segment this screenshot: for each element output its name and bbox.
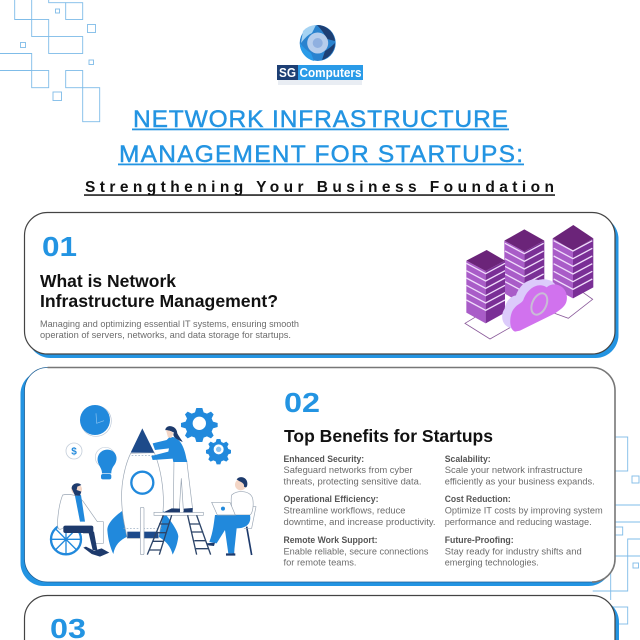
benefit: operational efficiency (284, 494, 436, 528)
benefit: enhanced security: Enhanced Security: (284, 454, 364, 465)
benefit: scalability: efficiently as your business expands. (445, 476, 595, 488)
title: MANAGEMENT FOR STARTUPS: (119, 141, 523, 168)
server stack right (553, 225, 593, 298)
section heading: Infrastructure Management? (40, 291, 278, 311)
ladder platform (147, 512, 211, 555)
section heading (40, 271, 278, 311)
benefit: cost reduction (445, 494, 603, 528)
illustration: startup team building a rocket (51, 405, 256, 557)
section heading: Top Benefits for Startups (284, 426, 493, 446)
benefit: future-proofing (445, 535, 582, 568)
title: NETWORK INFRASTRUCTURE (133, 106, 508, 133)
benefit: remote work support: Remote Work Support: (284, 535, 378, 546)
benefit: future-proofing: emerging technologies. (445, 558, 539, 568)
benefit: operational efficiency: Operational Efficiency: (284, 494, 378, 505)
benefit: enhanced security: threats, protecting sensitive data. (284, 476, 422, 488)
panel: top benefits for startups (20, 368, 615, 586)
benefit: cost reduction: performance and reducing wastage. (445, 517, 592, 528)
cloud (502, 279, 567, 332)
benefit: scalability (445, 454, 595, 488)
logo: SG Computers (277, 25, 363, 85)
icon: clock (80, 405, 111, 436)
description text: Managing and optimizing essential IT systems, ensuring smooth (40, 319, 299, 330)
title (118, 106, 524, 168)
benefit: remote work support: for remote teams. (284, 558, 356, 568)
icon: dollar coin: $ (71, 447, 77, 458)
description text: operation of servers, networks, and data storage for startups. (40, 330, 291, 341)
benefit: cost reduction: Optimize IT costs by improving system (445, 506, 603, 516)
benefit: remote work support: Enable reliable, secure connections (284, 546, 429, 558)
icon: large gear (181, 408, 218, 442)
top-left decorative squares (0, 0, 100, 122)
section number 02: 02 (284, 387, 320, 418)
description text (40, 319, 299, 341)
person: man in wheelchair (51, 483, 109, 557)
logo banner: Computers (300, 66, 362, 80)
panel: what is network infrastructure management (24, 212, 618, 358)
icon: light bulb (95, 447, 117, 479)
server stack left (466, 250, 505, 323)
benefit: operational efficiency: Streamline workflows, reduce (284, 506, 406, 516)
person: man with laptop (206, 477, 256, 556)
benefit: enhanced security (284, 454, 422, 488)
benefit: future-proofing: Stay ready for industry shifts and (445, 546, 582, 558)
logo banner: SG (279, 66, 296, 80)
benefit: enhanced security: Safeguard networks from cyber (284, 465, 413, 476)
logo banner (277, 65, 363, 85)
right decorative squares (593, 437, 640, 624)
illustration: servers and cloud (465, 225, 593, 339)
icon: small gear (206, 439, 231, 464)
benefit: remote work support (284, 535, 429, 568)
subtitle: Strengthening Your Business Foundation (85, 179, 554, 196)
benefit: operational efficiency: downtime, and increase productivity. (284, 517, 436, 528)
benefit: future-proofing: Future-Proofing: (445, 535, 514, 546)
person: woman on platform (151, 426, 193, 512)
benefit: scalability: Scalability: (445, 454, 491, 465)
icon: dollar coin (66, 443, 82, 459)
benefit: scalability: Scale your network infrastructure (445, 465, 583, 476)
rocket (107, 428, 178, 555)
server stack middle (504, 229, 544, 305)
benefit: cost reduction: Cost Reduction: (445, 494, 511, 505)
section heading: What is Network (40, 271, 176, 291)
logo emblem (300, 25, 336, 61)
panel: section 03 (24, 596, 619, 640)
section number 01: 01 (42, 231, 77, 262)
